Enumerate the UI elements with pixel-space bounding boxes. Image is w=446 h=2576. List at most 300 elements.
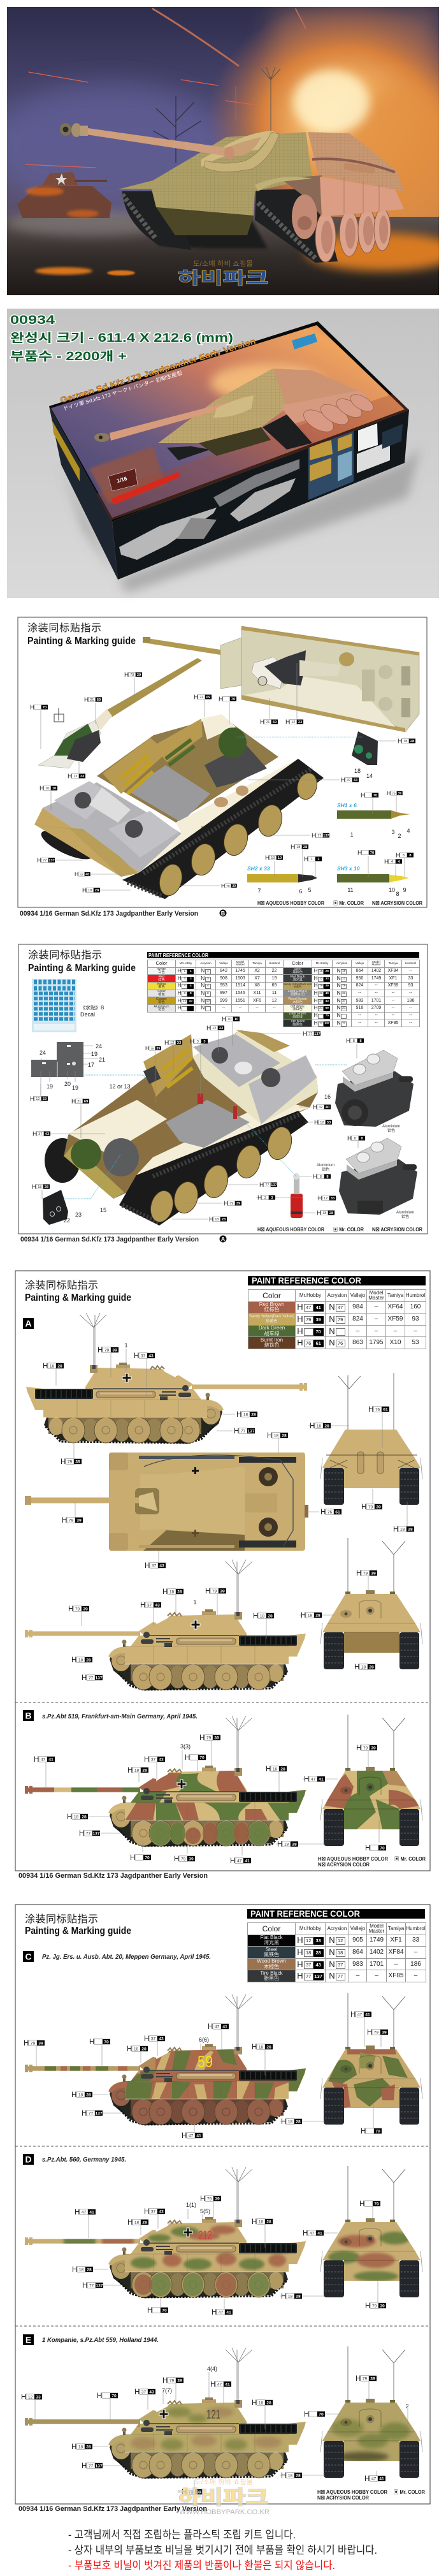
tank side view A, left side: [25, 1560, 306, 1690]
grey plate with decal numbers: 19: [72, 1085, 78, 1091]
number labels: 3: [391, 829, 395, 835]
colour callouts E: 18: [288, 2474, 292, 2478]
kit size text: [10, 314, 233, 363]
colour callouts C: 137: [95, 2112, 103, 2116]
colour callouts B: H: [79, 1830, 84, 1838]
panel: marking guide C, D and E: [15, 1905, 430, 2504]
colour callouts E: H: [356, 2375, 361, 2383]
colour callouts E: H: [210, 2381, 215, 2389]
paint table: sheet A right: XF59: [388, 983, 398, 988]
kit size text: 완성시 크기 - 611.4 X 212.6 (mm): [10, 331, 233, 345]
paint table: sheet A right: --: [358, 1021, 361, 1025]
paint table: sheet A right: Off White: [291, 1005, 305, 1009]
leader lines and colour callouts: 77: [43, 859, 47, 863]
paint table: sheet marking A/B: Color: [263, 1291, 281, 1300]
colour callouts E: H: [71, 2443, 76, 2451]
colour callouts: 8: [320, 1175, 322, 1179]
leader lines and colour callouts: H: [304, 856, 308, 863]
colour callouts: 3: [203, 1040, 206, 1044]
paint table: sheet A left: Color: [156, 960, 167, 966]
aluminium labels: Aluminium: [396, 1211, 414, 1215]
paint table: sheet A right: N: [337, 967, 341, 974]
paint table: sheet marking A/B: 战车绿: [264, 1331, 279, 1336]
paint table: sheet marking A/B: X10: [390, 1339, 401, 1346]
colour callouts C: 70: [375, 2130, 380, 2133]
panel: marking guide A and B: [15, 1271, 430, 1871]
colour callouts E: H: [82, 2463, 87, 2470]
paint table: sheet A left: 1514: [235, 983, 245, 988]
heading: Painting & Marking guide: [25, 1926, 131, 1936]
paint table: sheet marking A/B: [248, 1289, 426, 1349]
paint table: sheet A left: 3: [207, 977, 209, 981]
colour callouts A: H: [320, 1509, 326, 1516]
paint table: sheet marking A/B: N: [329, 1338, 335, 1347]
illustration: control box: [43, 1190, 68, 1225]
number labels A: 1: [193, 1599, 197, 1606]
number labels E: 4(4): [207, 2366, 217, 2372]
colour callouts: H: [32, 1183, 36, 1190]
colour callouts A: 79: [75, 1607, 80, 1612]
colour callouts: H: [303, 1030, 307, 1037]
grey plate with decal numbers: 19: [91, 1051, 97, 1057]
leader lines and colour callouts: 1: [317, 858, 320, 861]
number labels: 14: [366, 773, 373, 779]
colour callouts B: H: [127, 1767, 133, 1775]
paint table: sheet A right: 79: [342, 984, 345, 988]
colour callouts A: H: [145, 1562, 150, 1570]
tank front view A: [320, 1538, 422, 1669]
paint table: sheet marking A/B: H: [297, 1302, 303, 1312]
leader lines and colour callouts: [30, 663, 415, 894]
paint table: sheet A left: Vallejo: [219, 962, 228, 965]
colour callouts A: 18: [274, 1433, 278, 1438]
colour callouts: 18: [38, 1185, 41, 1189]
colour callouts C: H: [350, 2011, 356, 2019]
badge D and caption: D: [25, 2154, 32, 2164]
colour callouts D: H: [75, 2209, 80, 2216]
grey plate with decal numbers: 24: [40, 1050, 46, 1056]
colour callouts E: 41: [379, 2477, 384, 2482]
paint table: sheet A left: Copper: [156, 997, 167, 1001]
colour callouts E: H: [162, 2377, 168, 2385]
legend: [257, 1227, 422, 1233]
colour callouts C: H: [208, 2023, 213, 2031]
paint table: sheet A right: Dark Green: [289, 1012, 306, 1016]
leader lines and colour callouts: 8: [409, 854, 412, 858]
paint table: sheet marking C/D/E: H: [297, 1971, 303, 1980]
paint table: sheet marking C/D/E: 18: [338, 1950, 343, 1956]
colour callouts D: 47: [219, 2311, 223, 2315]
paint table: sheet marking C/D/E: 137: [314, 1973, 322, 1979]
paint table: sheet A right: 18: [342, 970, 345, 973]
colour callouts B: H: [277, 1841, 282, 1848]
paint table: sheet A right: 824: [356, 983, 363, 988]
paint table: sheet A right: --: [375, 991, 378, 995]
colour callouts C: 79: [31, 2042, 35, 2045]
leader lines and colour callouts: H: [37, 857, 41, 864]
heading: [25, 1280, 131, 1303]
leader lines and colour callouts: H: [357, 849, 362, 856]
colour callouts B: 70: [145, 1855, 150, 1861]
paint table: sheet marking C/D/E: –: [356, 1972, 359, 1979]
colour callouts A: H: [43, 1363, 48, 1370]
number labels: 9: [403, 887, 406, 893]
leader lines and colour callouts: 21: [90, 698, 94, 702]
colour callouts C: 41: [222, 2025, 227, 2029]
paint table: sheet A left: 69: [272, 983, 277, 988]
paint table: sheet A right: 消光黑: [292, 978, 303, 982]
colour callouts D: H: [212, 2309, 217, 2316]
legend: H☒ AQUEOUS HOBBY COLOR: [317, 2489, 387, 2495]
colour callouts: 79: [229, 1202, 233, 1206]
colour callouts A: 28: [408, 1528, 413, 1532]
paint table: sheet A right: 79: [319, 984, 322, 988]
colour callouts: 28: [45, 1185, 49, 1189]
paint table: sheet A left: XF6: [253, 999, 261, 1003]
paint table: sheet marking C/D/E: Steel: [266, 1947, 277, 1952]
aluminium labels: Aluminium: [317, 1164, 334, 1167]
colour callouts B: 28: [82, 1815, 87, 1820]
paint table: sheet marking C/D/E: 905: [352, 1936, 363, 1943]
paint table: sheet A left: H: [178, 1005, 182, 1011]
colour callouts B: 41: [319, 1778, 324, 1782]
paint table: sheet marking C/D/E: 消光黑: [264, 1940, 279, 1945]
leader lines and colour callouts: 4: [398, 860, 400, 864]
leader lines and colour callouts: 43: [354, 779, 357, 782]
colour callouts D: 41: [89, 2210, 94, 2215]
decal sheet: Decal: [80, 1011, 95, 1018]
colour callouts E: H: [97, 2392, 102, 2400]
legend: ▣ Mr. COLOR: [333, 900, 364, 906]
decal sheet: 《水贴》B: [80, 1004, 104, 1011]
paint table: sheet A left: 红色: [158, 978, 165, 982]
colour callouts D: H: [365, 2302, 370, 2310]
leader lines and colour callouts: 1: [311, 858, 313, 861]
number labels D: [186, 2202, 210, 2214]
colour callouts E: 37: [141, 2390, 146, 2395]
colour callouts A: 77: [241, 1430, 245, 1433]
leader lines and colour callouts: 70: [231, 698, 235, 701]
colour callouts: 12: [320, 1121, 324, 1125]
leader lines and colour callouts: 10: [271, 856, 275, 860]
illustration: engine 2: [339, 1138, 417, 1215]
paint table: sheet A left: 842: [220, 969, 227, 973]
colour callouts A: H: [393, 1526, 398, 1533]
paint table: sheet A right: 33: [408, 976, 413, 981]
colour callouts A: 18: [169, 1590, 174, 1594]
colour callouts E: H: [364, 2475, 370, 2483]
colour callouts B: H: [230, 1857, 235, 1865]
colour callouts B: H: [185, 1754, 190, 1762]
colour callouts: H: [259, 1182, 264, 1189]
number labels D: 1(1): [186, 2202, 196, 2208]
colour callouts E: H: [134, 2389, 140, 2396]
paint table: sheet A left: Acrysion: [200, 962, 212, 965]
colour callouts D: 41: [317, 2232, 322, 2236]
paint table: sheet marking A/B: 1795: [369, 1339, 384, 1346]
paint table: sheet A right: 33: [326, 977, 329, 981]
paint table: sheet A left: 3: [190, 977, 192, 981]
hero watermark: 하비파크: [178, 268, 268, 288]
paint table: sheet A right: --: [375, 1021, 378, 1025]
paint table: sheet marking A/B: H: [297, 1314, 303, 1324]
leader lines and colour callouts: 137: [48, 859, 55, 863]
paint table header bar: [147, 952, 419, 958]
box front side with kit sprues: [112, 410, 409, 580]
colour callouts: 3: [271, 1196, 273, 1200]
colour callouts A: 28: [369, 1665, 374, 1669]
colour callouts B: 79: [363, 1746, 368, 1751]
colour callouts A: 28: [282, 1433, 287, 1438]
colour callouts B: H: [144, 1756, 149, 1764]
grey plate with decal numbers: 20: [64, 1081, 71, 1087]
colour callouts: H: [318, 1195, 322, 1202]
colour callouts A: H: [162, 1588, 168, 1596]
colour callouts E: H: [304, 2411, 309, 2419]
colour callouts: 33: [43, 1097, 47, 1101]
colour callouts: 18: [215, 1218, 219, 1222]
colour callouts E: 28: [296, 2474, 301, 2478]
footer sheet 3: 00934 1/16 German Sd.Kfz 173 Jagdpanther Early Version: [18, 1872, 208, 1880]
colour callouts C: 28: [141, 2047, 147, 2052]
colour callouts D: 18: [79, 2267, 83, 2272]
number labels A: [124, 1342, 197, 1606]
leader lines and colour callouts: 39: [398, 792, 401, 796]
paint table: sheet A right: 70: [326, 1014, 329, 1018]
paint table: sheet A right: --: [409, 969, 412, 973]
colour callouts A: 37: [152, 1563, 156, 1569]
colour callouts C: H: [367, 2029, 372, 2037]
tank top view: [25, 1453, 308, 1551]
colour callouts: H: [32, 1131, 37, 1138]
colour callouts D: 70: [374, 2202, 379, 2206]
paint table: sheet marking A/B: 863: [352, 1339, 363, 1346]
grey plate with decal numbers: 12 or 13: [109, 1083, 131, 1090]
illustration: engine 1: [335, 1050, 414, 1127]
colour callouts: 37: [38, 1132, 42, 1136]
paint table: sheet A right: XF85: [388, 1021, 398, 1025]
badge C and caption: [23, 1951, 211, 1962]
colour callouts E: 39: [177, 2378, 182, 2383]
paint table: sheet A right: 1701: [371, 999, 381, 1003]
colour callouts: H: [190, 1038, 194, 1045]
leader lines and colour callouts: H: [221, 882, 225, 889]
colour callouts A: 39: [376, 1505, 381, 1510]
paint table: sheet marking C/D/E: 12: [338, 1938, 343, 1943]
colour callouts A: H: [267, 1432, 272, 1440]
colour callouts B: 18: [74, 1815, 78, 1820]
leader lines and colour callouts: H: [30, 704, 34, 711]
kit size text: 00934: [10, 314, 55, 327]
leader lines and colour callouts: H: [341, 777, 345, 784]
colour callouts A: H: [134, 1352, 139, 1360]
tank side view E camouflage: 121: [206, 2408, 220, 2422]
colour callouts C: H: [71, 2091, 76, 2099]
colour callouts A: 76: [327, 1510, 332, 1515]
paint table: sheet A right: 28: [326, 970, 329, 973]
colour callouts: 18: [322, 1211, 326, 1215]
colour callouts: 33: [177, 1041, 181, 1045]
colour callouts A: 39: [83, 1607, 88, 1612]
aluminium labels: 铝色: [387, 1128, 395, 1133]
leader lines and colour callouts: H: [285, 719, 290, 726]
leader lines and colour callouts: 79: [130, 673, 134, 677]
leader lines and colour callouts: H: [194, 694, 198, 701]
paint table: sheet marking C/D/E: 33: [316, 1938, 321, 1943]
paint table: sheet A left: Silver: [157, 990, 166, 993]
colour callouts: 39: [156, 1047, 160, 1051]
colour callouts C: H: [24, 2040, 29, 2047]
paint table: sheet A left: Master: [236, 963, 245, 966]
paint table: sheet A right: N: [337, 997, 341, 1004]
colour callouts D: H: [281, 2293, 286, 2301]
colour callouts D: 28: [142, 2220, 147, 2225]
paint table: sheet A left: 11: [272, 991, 277, 995]
colour callouts: 12: [324, 1197, 327, 1201]
aluminium labels: 铝色: [401, 1214, 409, 1219]
colour callouts A: 28: [86, 1658, 91, 1663]
colour callouts C: 79: [374, 2030, 378, 2035]
heading: Painting & Marking guide: [25, 1292, 131, 1303]
colour callouts C: 18: [134, 2047, 138, 2052]
legend: [257, 900, 422, 906]
paint table: sheet marking A/B: 53: [412, 1339, 419, 1346]
colour callouts C: 39: [38, 2042, 43, 2045]
colour callouts: H: [314, 1119, 319, 1126]
paint table: sheet marking C/D/E: Tamiya: [388, 1926, 404, 1931]
footer B: 00934 1/16 German Sd.Kfz 173 Jagdpanther Early Version: [20, 910, 198, 918]
colour callouts D: 39: [380, 2304, 385, 2308]
paint table: sheet A left: H: [178, 997, 182, 1004]
colour callouts: 8: [359, 1039, 362, 1043]
colour callouts C: 47: [215, 2025, 219, 2029]
paint table: sheet A left: --: [239, 1006, 241, 1010]
legend: [318, 1856, 426, 1868]
hero watermark: 도/소매 하비 쇼핑몰: [193, 259, 253, 268]
colour callouts D: H: [303, 2230, 308, 2237]
paint table: sheet A right: Model: [372, 960, 380, 963]
colour callouts A: 39: [220, 1589, 225, 1594]
colour callouts E: 28: [266, 2401, 271, 2405]
colour callouts E: 28: [86, 2445, 91, 2450]
colour callouts E: 70: [319, 2413, 324, 2417]
colour callouts A: 28: [315, 1613, 320, 1618]
colour callouts E: 77: [89, 2464, 93, 2469]
number labels: 4: [406, 828, 410, 834]
paint table: sheet A right: Acrysion: [336, 962, 347, 965]
colour callouts C: 18: [259, 2045, 263, 2049]
badge D and caption: s.Pz.Abt. 560, Germany 1945.: [42, 2156, 126, 2163]
number labels: 5: [308, 887, 312, 893]
paint table: sheet A right: 2709: [371, 1006, 381, 1010]
paint table: sheet marking A/B: –: [394, 1328, 397, 1335]
colour callouts A: 43: [159, 1563, 164, 1569]
legend: N☒ ACRYSION COLOR: [317, 2495, 369, 2501]
paint table: sheet marking C/D/E: XF1: [390, 1936, 402, 1943]
badge B and caption: B: [25, 1710, 32, 1720]
paint table: sheet A right: H: [314, 990, 318, 996]
paint table: sheet A left: 953: [220, 983, 227, 988]
colour callouts C: H: [281, 2118, 286, 2126]
paint table: sheet marking A/B: XF64: [388, 1303, 403, 1310]
paint table: sheet A left: [147, 960, 284, 1013]
leader lines and colour callouts: H: [398, 738, 402, 745]
leader lines and colour callouts: 4: [391, 860, 393, 864]
colour callouts D: 79: [372, 2304, 377, 2308]
paint table: sheet A right: 37: [342, 1000, 345, 1003]
colour callouts C: 18: [78, 2093, 83, 2098]
colour callouts C: H: [89, 2038, 94, 2046]
number labels: 10: [389, 887, 395, 893]
paint table: sheet A left: 1551: [235, 999, 245, 1003]
paint table: sheet A right: 77: [342, 1022, 345, 1025]
paint table: sheet marking A/B: 47: [338, 1305, 343, 1310]
leader lines and colour callouts: 69: [206, 696, 210, 699]
colour callouts: 33: [219, 1027, 223, 1030]
paint table: sheet marking C/D/E: 1701: [370, 1961, 384, 1968]
Sherman tank in the background: [17, 172, 112, 218]
colour callouts C: 28: [266, 2045, 271, 2049]
paint table: sheet A right: N: [337, 1012, 341, 1018]
Jagdpanther hero tank: [60, 123, 404, 263]
paint table: sheet marking C/D/E: Mr.Hobby: [299, 1926, 321, 1931]
colour callouts A: H: [301, 1612, 306, 1620]
leader lines and colour callouts: 39: [232, 884, 236, 888]
notice text: - 상자 내부의 부품보호 비닐을 벗기시기 전에 부품을 확인 하시기 바랍니다.: [68, 2544, 377, 2556]
paint table: sheet A right: 918: [356, 1006, 363, 1010]
shells SH1 SH2 SH3: SH1 x 6: [337, 802, 357, 809]
paint table: sheet A right: Tamiya: [389, 962, 398, 965]
tank rear view A: [320, 1373, 422, 1505]
tank front view B camouflage: [320, 1715, 422, 1846]
colour callouts: H: [30, 1095, 34, 1102]
colour callouts A: 137: [247, 1430, 255, 1433]
colour callouts B: 47: [237, 1859, 241, 1863]
colour callouts A: 18: [260, 1614, 264, 1618]
grey plate with decal numbers: 23: [75, 1211, 82, 1218]
badge B and caption: s.Pz.Abt 519, Frankfurt-am-Main Germany, April 1945.: [42, 1713, 198, 1720]
colour callouts B: H: [174, 1855, 179, 1863]
leader lines and colour callouts: H: [396, 852, 400, 859]
colour callouts D: 70: [162, 2308, 167, 2313]
paint table: sheet A left: 10: [206, 1000, 210, 1003]
paint table: sheet marking C/D/E: 983: [352, 1961, 363, 1968]
colour callouts E: 39: [196, 2491, 201, 2494]
paint table: sheet A right: H: [314, 983, 318, 988]
paint table: sheet A left: N: [201, 1005, 205, 1011]
paint table: sheet marking A/B: Mr.Hobby: [299, 1292, 321, 1298]
box lid artwork: [48, 321, 409, 522]
paint table: sheet A right: 18: [319, 970, 322, 973]
paint table: sheet A left: Mr.Hobby: [180, 962, 192, 965]
paint table: sheet A right: 186: [407, 999, 414, 1003]
paint table: sheet A right: Vallejo: [356, 962, 364, 965]
number labels A: 1: [124, 1342, 128, 1349]
paint table: sheet A left: 黄色: [158, 985, 165, 989]
colour callouts D: 28: [266, 2220, 271, 2224]
number labels: [257, 768, 410, 897]
legend: H☒ AQUEOUS HOBBY COLOR: [318, 1856, 388, 1862]
paint table: sheet A right: 战车绿: [292, 1015, 303, 1019]
paint table: sheet A right: 原野灰(1): [291, 993, 305, 997]
colour callouts A: 77: [89, 1676, 93, 1681]
paint table: sheet A right: 40: [326, 992, 329, 995]
paint table: sheet marking A/B: N: [329, 1314, 335, 1324]
colour callouts A: 18: [50, 1365, 54, 1368]
legend: H☒ AQUEOUS HOBBY COLOR: [257, 1227, 324, 1233]
illustration: interior wall plate with gun: [143, 626, 419, 732]
colour callouts B: 79: [181, 1857, 185, 1862]
